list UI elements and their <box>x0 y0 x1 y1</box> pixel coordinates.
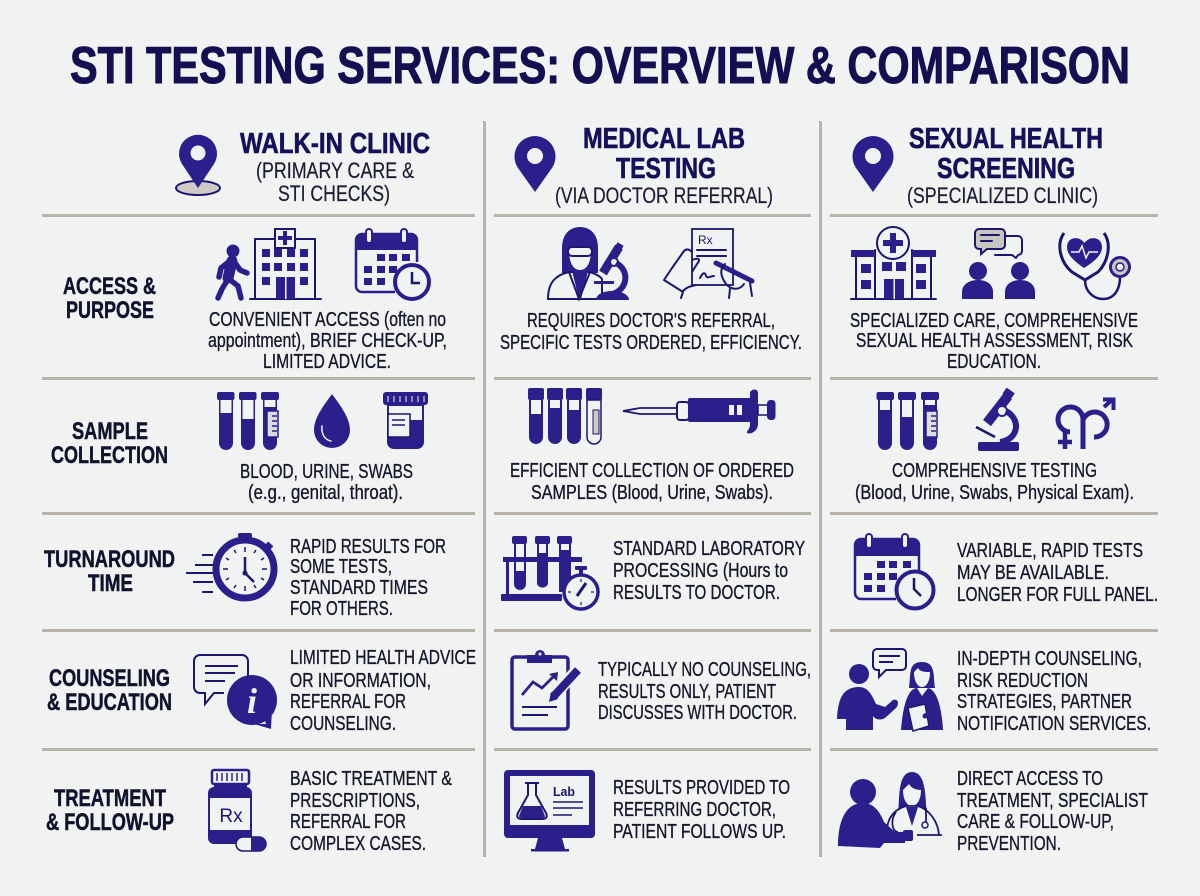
heading: sexual health column <box>907 123 1103 208</box>
text: walk-in treatment: REFERRAL FOR <box>290 811 406 833</box>
icon: counselor talking with patient <box>837 649 943 731</box>
text: walk-in counseling: OR INFORMATION, <box>290 670 431 692</box>
heading: sexual health column: SEXUAL HEALTH <box>909 123 1103 155</box>
icon: liquid drop <box>314 394 350 448</box>
text: screening turnaround <box>957 540 1158 606</box>
text: screening treatment: PREVENTION. <box>957 833 1061 855</box>
text: lab treatment: RESULTS PROVIDED TO <box>613 777 790 799</box>
text: walk-in access: CONVENIENT ACCESS (often no <box>209 309 446 331</box>
row label: treatment and follow-up: TREATMENT <box>54 785 166 812</box>
text: lab counseling <box>598 659 811 724</box>
icon: three tubes <box>876 392 939 450</box>
row label: counseling and education: COUNSELING <box>49 665 170 692</box>
icon: speech bubbles with info: i <box>247 681 257 721</box>
text: walk-in counseling: REFERRAL FOR <box>290 691 406 713</box>
heading: medical lab column <box>555 123 773 208</box>
icon: gender symbols <box>1058 399 1114 449</box>
heading: walk-in clinic column: (PRIMARY CARE & <box>256 158 414 183</box>
text: lab counseling: DISCUSSES WITH DOCTOR. <box>598 702 797 724</box>
text: screening turnaround: MAY BE AVAILABLE. <box>957 562 1109 584</box>
text: walk-in samples <box>240 461 413 504</box>
text: walk-in counseling: COUNSELING. <box>290 713 396 735</box>
icon: location pin <box>514 136 555 192</box>
icon: computer monitor with lab flask <box>504 770 595 852</box>
text: walk-in counseling: LIMITED HEALTH ADVICE <box>290 647 476 669</box>
row label: turnaround time <box>44 546 175 597</box>
text: walk-in treatment: BASIC TREATMENT & <box>290 768 453 790</box>
text: screening samples: (Blood, Urine, Swabs, Physical Exam). <box>855 482 1134 504</box>
heading: walk-in clinic column: STI CHECKS) <box>278 181 390 206</box>
text: lab access: SPECIFIC TESTS ORDERED, EFFICIENCY. <box>500 332 802 354</box>
text: screening samples: COMPREHENSIVE TESTING <box>892 460 1097 482</box>
icon: calendar with clock <box>356 229 429 299</box>
text: lab access: REQUIRES DOCTOR'S REFERRAL, <box>527 310 775 332</box>
text: walk-in access <box>208 309 447 373</box>
text: walk-in samples: BLOOD, URINE, SWABS <box>240 461 413 483</box>
text: lab samples: SAMPLES (Blood, Urine, Swabs). <box>531 482 773 504</box>
text: lab treatment <box>613 777 790 843</box>
icon: stopwatch with speed lines <box>186 533 274 598</box>
text: screening access <box>850 310 1138 373</box>
text: lab treatment: PATIENT FOLLOWS UP. <box>613 821 786 843</box>
text: screening treatment: TREATMENT, SPECIALIST <box>957 790 1148 812</box>
text: screening access: EDUCATION. <box>947 351 1041 373</box>
row label: access and purpose: PURPOSE <box>66 297 154 324</box>
text: walk-in turnaround: RAPID RESULTS FOR <box>290 536 446 558</box>
icon: three blood tubes <box>217 392 279 450</box>
text: screening treatment: CARE & FOLLOW-UP, <box>957 811 1114 833</box>
heading: walk-in clinic column: WALK-IN CLINIC <box>240 128 430 160</box>
icon: pipette <box>623 389 776 433</box>
heading: medical lab column: (VIA DOCTOR REFERRAL) <box>555 183 773 208</box>
text: walk-in treatment: COMPLEX CASES. <box>290 833 426 855</box>
text: screening counseling: RISK REDUCTION <box>957 670 1088 692</box>
icon: location pin <box>852 136 894 192</box>
text: walk-in samples: (e.g., genital, throat). <box>248 482 403 504</box>
icon: test tube rack with stopwatch <box>501 536 598 609</box>
text: screening treatment: DIRECT ACCESS TO <box>957 768 1103 790</box>
text: screening samples <box>855 460 1134 504</box>
row label: sample collection <box>51 418 168 469</box>
row label: sample collection: COLLECTION <box>51 442 168 469</box>
text: lab treatment: REFERRING DOCTOR, <box>613 799 776 821</box>
text: walk-in access: appointment), BRIEF CHECK-UP, <box>208 330 447 352</box>
row label: turnaround time: TIME <box>88 570 133 597</box>
row label: treatment and follow-up: & FOLLOW-UP <box>46 809 174 836</box>
text: screening turnaround: VARIABLE, RAPID TESTS <box>957 540 1143 562</box>
heading: medical lab column: TESTING <box>616 153 716 185</box>
text: screening counseling: IN-DEPTH COUNSELING, <box>957 648 1142 670</box>
row label: access and purpose: ACCESS & <box>63 273 156 300</box>
text: walk-in turnaround <box>290 536 446 620</box>
row label: counseling and education: & EDUCATION <box>47 689 172 716</box>
icon: speech bubbles with info <box>194 655 277 729</box>
row label: counseling and education <box>47 665 172 716</box>
icon: hands signing prescription: Rx <box>698 233 713 247</box>
icon: microscope <box>594 242 629 300</box>
text: lab turnaround <box>613 538 805 604</box>
text: lab samples <box>510 460 794 504</box>
text: lab turnaround: RESULTS TO DOCTOR. <box>613 582 780 604</box>
row label: sample collection: SAMPLE <box>72 418 148 445</box>
text: walk-in treatment <box>290 768 453 855</box>
icon: two people talking <box>962 229 1035 299</box>
icon: doctor with patient <box>838 772 942 848</box>
icon: hands signing prescription <box>664 229 752 298</box>
heading: sexual health column: SCREENING <box>937 153 1075 185</box>
icon: scientist with goggles <box>548 227 602 299</box>
icon: prescription bottle with pill: Rx <box>219 806 243 827</box>
text: walk-in access: LIMITED ADVICE. <box>263 351 391 373</box>
icon: heart stethoscope <box>1060 233 1130 299</box>
row label: treatment and follow-up <box>46 785 174 836</box>
text: walk-in treatment: PRESCRIPTIONS, <box>290 790 420 812</box>
icon: location pin on base <box>176 135 220 195</box>
icon: computer monitor with lab flask: Lab <box>553 784 575 799</box>
text: screening treatment <box>957 768 1148 855</box>
text: lab counseling: RESULTS ONLY, PATIENT <box>598 681 776 703</box>
text: lab turnaround: PROCESSING (Hours to <box>613 560 788 582</box>
text: walk-in turnaround: STANDARD TIMES <box>290 577 428 599</box>
icon: calendar with clock <box>855 534 934 608</box>
row label: access and purpose <box>63 273 156 324</box>
icon: hospital building <box>250 229 321 299</box>
text: screening counseling <box>957 648 1151 735</box>
icon: microscope <box>976 388 1019 451</box>
icon: urine sample cup <box>383 392 428 448</box>
icon: prescription bottle with pill <box>208 770 266 851</box>
row label: turnaround time: TURNAROUND <box>44 546 175 573</box>
heading: sexual health column: (SPECIALIZED CLINIC) <box>907 183 1098 208</box>
heading: walk-in clinic column <box>240 128 430 206</box>
icon: person walking <box>218 244 247 298</box>
icon: four sample tubes <box>528 388 602 444</box>
text: walk-in turnaround: FOR OTHERS. <box>290 598 393 620</box>
text: lab counseling: TYPICALLY NO COUNSELING, <box>598 659 811 681</box>
icon: clipboard with chart and pen <box>512 650 578 729</box>
text: walk-in turnaround: SOME TESTS, <box>290 556 392 578</box>
text: lab access <box>500 310 802 354</box>
text: walk-in counseling <box>290 647 476 735</box>
heading: medical lab column: MEDICAL LAB <box>583 123 745 155</box>
text: screening counseling: STRATEGIES, PARTNER <box>957 691 1132 713</box>
text: lab samples: EFFICIENT COLLECTION OF ORDERED <box>510 460 794 482</box>
icon: specialised clinic building <box>851 227 936 299</box>
text: lab turnaround: STANDARD LABORATORY <box>613 538 805 560</box>
